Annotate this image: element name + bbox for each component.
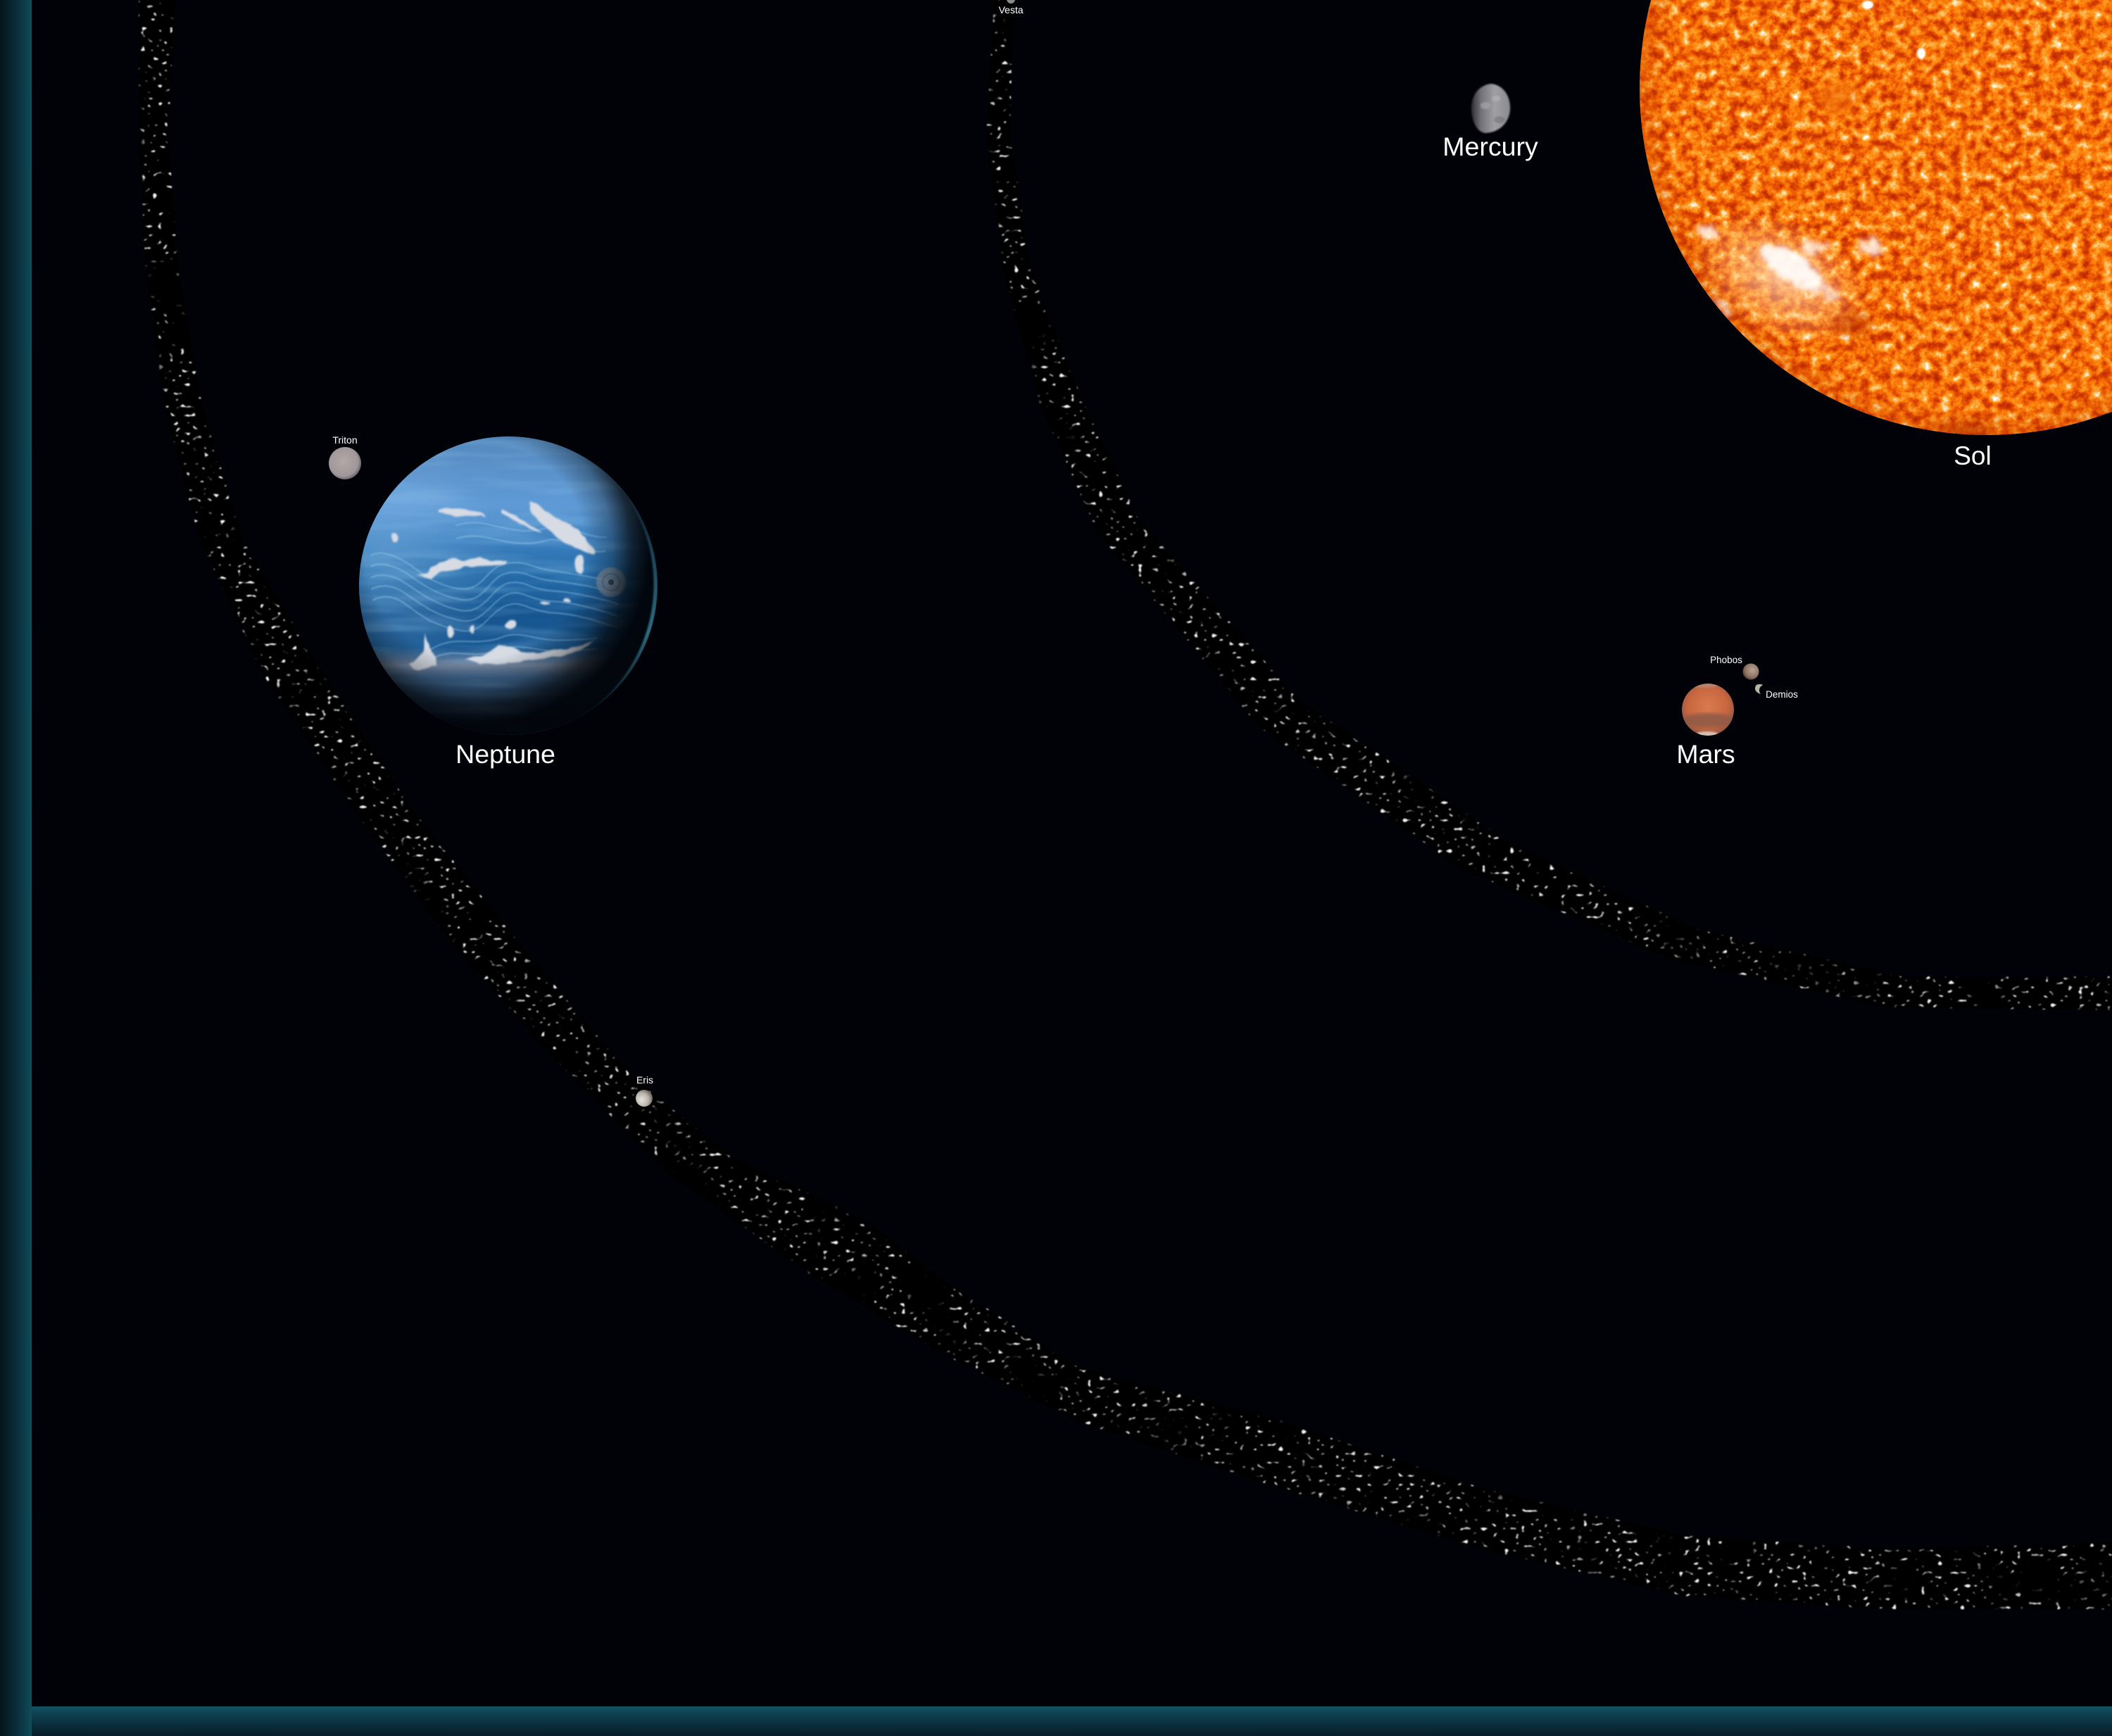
label: Neptune: Neptune — [455, 739, 555, 769]
Neptune rim light — [594, 498, 658, 707]
Vesta — [998, 0, 1024, 15]
label: Eris: Eris — [636, 1074, 653, 1086]
sun surface texture — [1633, 0, 2112, 444]
Neptune band streaks — [360, 441, 624, 733]
sun limb darkening — [1640, 0, 2112, 435]
Eris — [636, 1074, 653, 1107]
Neptune cyclone — [596, 567, 626, 597]
Mars disc — [1682, 682, 1735, 737]
Vesta body — [1007, 0, 1015, 4]
frame: left edge — [0, 0, 32, 1736]
label: Phobos: Phobos — [1710, 655, 1742, 665]
label: Mars: Mars — [1676, 739, 1735, 769]
moon: Phobos — [1743, 663, 1759, 680]
inner asteroid belt — [986, 0, 2112, 1010]
moon: Deimos — [1755, 684, 1763, 694]
label: Demios: Demios — [1766, 689, 1798, 700]
sun active region — [1670, 1, 1993, 439]
Mercury — [1471, 84, 1510, 133]
Neptune clouds — [391, 501, 596, 669]
Triton body — [329, 447, 361, 479]
label: Triton: Triton — [332, 434, 358, 446]
Sun — [1633, 0, 2112, 444]
Neptune globe — [356, 433, 662, 739]
Neptune wave swirls — [373, 526, 620, 663]
Mars with moons — [1676, 655, 1798, 769]
Neptune — [356, 433, 662, 769]
label: Mercury: Mercury — [1442, 132, 1538, 161]
label: Vesta: Vesta — [998, 4, 1024, 15]
Eris body — [636, 1090, 653, 1107]
label: Sol: Sol — [1954, 441, 1992, 470]
Triton — [329, 434, 361, 479]
frame: bottom edge — [32, 1706, 2112, 1736]
Neptune shadow — [358, 435, 659, 736]
